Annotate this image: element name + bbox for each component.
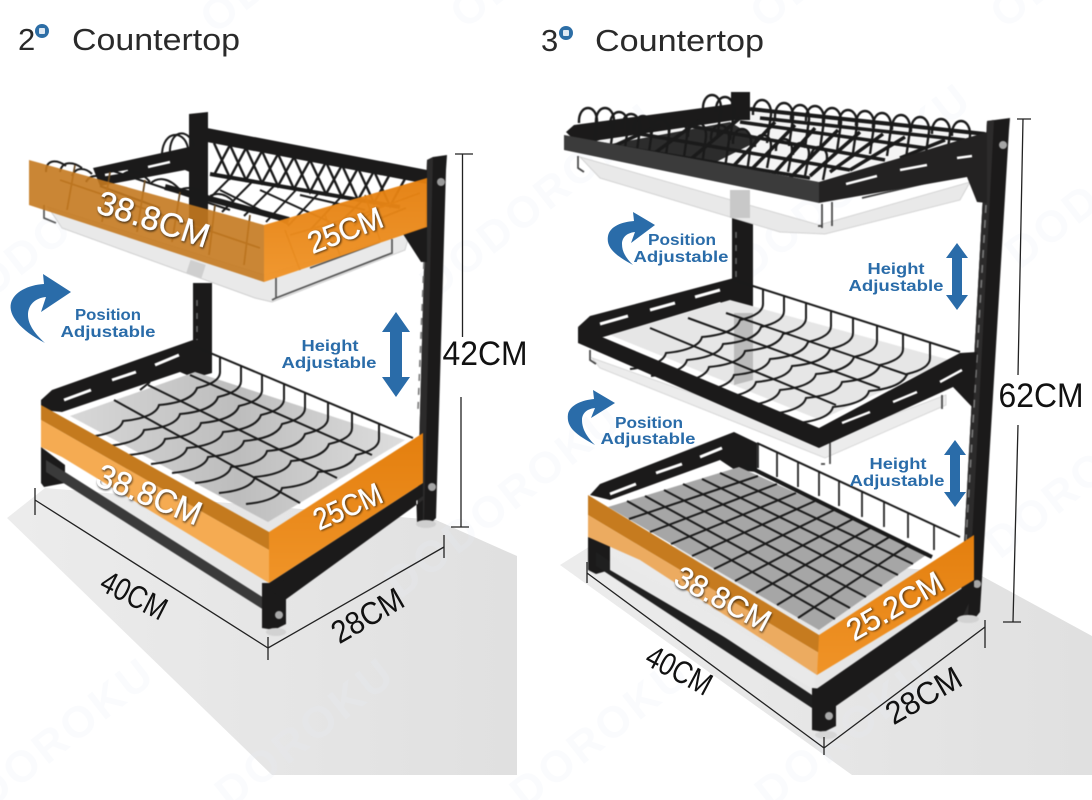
- label: 38.8CM upper long side: 38.8CM: [93, 184, 214, 255]
- text: position adjustable 3 tier lower: [600, 415, 696, 448]
- lower tier wires: [87, 347, 413, 504]
- lower tier under pipe: [41, 447, 436, 636]
- upper tier bracket: [403, 226, 427, 262]
- top tray: [578, 156, 970, 234]
- label: 25CM upper short side: 25CM: [303, 200, 388, 261]
- title: 2 tier countertop: [18, 22, 240, 57]
- icon: height arrow 3 tier upper: [946, 243, 968, 310]
- middle tier front panel: [578, 327, 819, 448]
- text: position adjustable 3 tier upper: [634, 232, 729, 266]
- label: 40CM width: 40CM: [95, 563, 173, 627]
- top tier cage: [564, 95, 985, 184]
- orange highlight: bottom long side base: [588, 515, 819, 675]
- title: 3 tier countertop: 3: [541, 23, 558, 58]
- label: 38.8CM lower long side: 38.8CM: [91, 457, 207, 532]
- dimension lines: 3 tier: [587, 119, 1031, 755]
- watermark pattern: DODOROKU: [726, 73, 981, 288]
- top tier front panel: [564, 135, 819, 203]
- title: 2 tier countertop: Countertop: [72, 22, 240, 57]
- rack: 2 tier: [29, 112, 447, 636]
- dimension lines: 2 tier: [35, 154, 473, 660]
- icon: height arrow 2 tier: [382, 312, 410, 397]
- label: 38.8CM bottom long side: 38.8CM: [669, 559, 777, 639]
- text: position adjustable 3 tier lower: Adjustable: [600, 431, 696, 448]
- orange highlight: lower long side band: [41, 405, 269, 550]
- label: 40CM width 3 tier: 40CM: [640, 638, 719, 703]
- watermark pattern: DODOROKU: [376, 393, 631, 608]
- text: height adjustable 2 tier: [282, 338, 377, 372]
- lower tier back panel: [41, 340, 212, 412]
- text: position adjustable 3 tier upper: Adjustable: [634, 249, 729, 266]
- title: 3 tier countertop: Countertop: [595, 23, 764, 58]
- back post: [731, 92, 753, 313]
- right post: [960, 118, 1010, 617]
- label: 25.2CM bottom short side: 25.2CM: [840, 564, 949, 648]
- icon: tier badge: [559, 26, 573, 40]
- orange highlight: bottom short side: [817, 535, 974, 675]
- orange highlight: upper short side: [264, 178, 427, 282]
- text: position adjustable 2 tier: Position: [75, 307, 141, 324]
- text: position adjustable 2 tier: [60, 307, 156, 341]
- text: height adjustable 3 tier lower: [850, 456, 945, 490]
- label: 28CM depth 3 tier: 28CM: [879, 659, 968, 732]
- middle tier back panel: [578, 278, 753, 338]
- right post: [417, 155, 447, 522]
- label: 25CM lower short side: 25CM: [308, 476, 388, 537]
- label: 62CM height: 62CM: [998, 377, 1084, 415]
- orange highlight: upper long side: [29, 160, 264, 282]
- orange highlight: lower short side: [269, 433, 423, 583]
- floor shadow: 2 tier: [7, 488, 517, 775]
- lower tier floor tray: [70, 372, 405, 522]
- text: position adjustable 3 tier lower: Position: [615, 415, 683, 432]
- orange highlight: bottom long side band: [588, 495, 819, 653]
- upper tray: [44, 205, 410, 302]
- text: position adjustable 2 tier: Adjustable: [60, 324, 156, 341]
- label: 28CM depth: 28CM: [325, 580, 410, 651]
- bottom tier grid: [627, 473, 913, 619]
- bottom tier back panel: [590, 432, 757, 500]
- upper tier cage: [46, 128, 427, 270]
- icon: height arrow 3 tier lower: [944, 440, 966, 507]
- bottom tier back wires: [745, 443, 960, 557]
- text: height adjustable 2 tier: Adjustable: [282, 355, 377, 372]
- icon: position arrow 3 tier upper: [608, 212, 655, 265]
- orange highlight: lower long side base: [41, 420, 269, 583]
- icon: position arrow 3 tier lower: [568, 390, 615, 445]
- rack: 3 tier: [564, 92, 1010, 739]
- top tier side panel and bracket: [819, 132, 987, 203]
- text: height adjustable 3 tier upper: [848, 261, 944, 295]
- title: 3 tier countertop: [541, 23, 764, 58]
- middle tier floor: [610, 300, 950, 420]
- middle tier side panel and bracket: [819, 352, 977, 448]
- text: height adjustable 3 tier upper: Adjustable: [848, 278, 944, 295]
- label: 42CM height: 42CM: [442, 335, 528, 373]
- text: position adjustable 3 tier upper: Position: [648, 232, 716, 249]
- back post: [189, 112, 212, 373]
- bottom tier under frame: [588, 537, 979, 739]
- watermark pattern: DODOROKU: [411, 93, 666, 308]
- floor shadow: 3 tier: [560, 540, 1092, 775]
- bottom tier floor: [608, 467, 929, 630]
- icon: position arrow 2 tier: [11, 274, 71, 343]
- icon: tier badge: [35, 24, 49, 38]
- text: height adjustable 2 tier: Height: [302, 338, 359, 355]
- text: height adjustable 3 tier lower: Adjustable: [850, 473, 945, 490]
- middle tier wires: [630, 280, 960, 423]
- text: height adjustable 3 tier upper: Height: [868, 261, 925, 278]
- middle tray: [590, 350, 946, 464]
- text: height adjustable 3 tier lower: Height: [870, 456, 927, 473]
- title: 2 tier countertop: 2: [18, 22, 35, 57]
